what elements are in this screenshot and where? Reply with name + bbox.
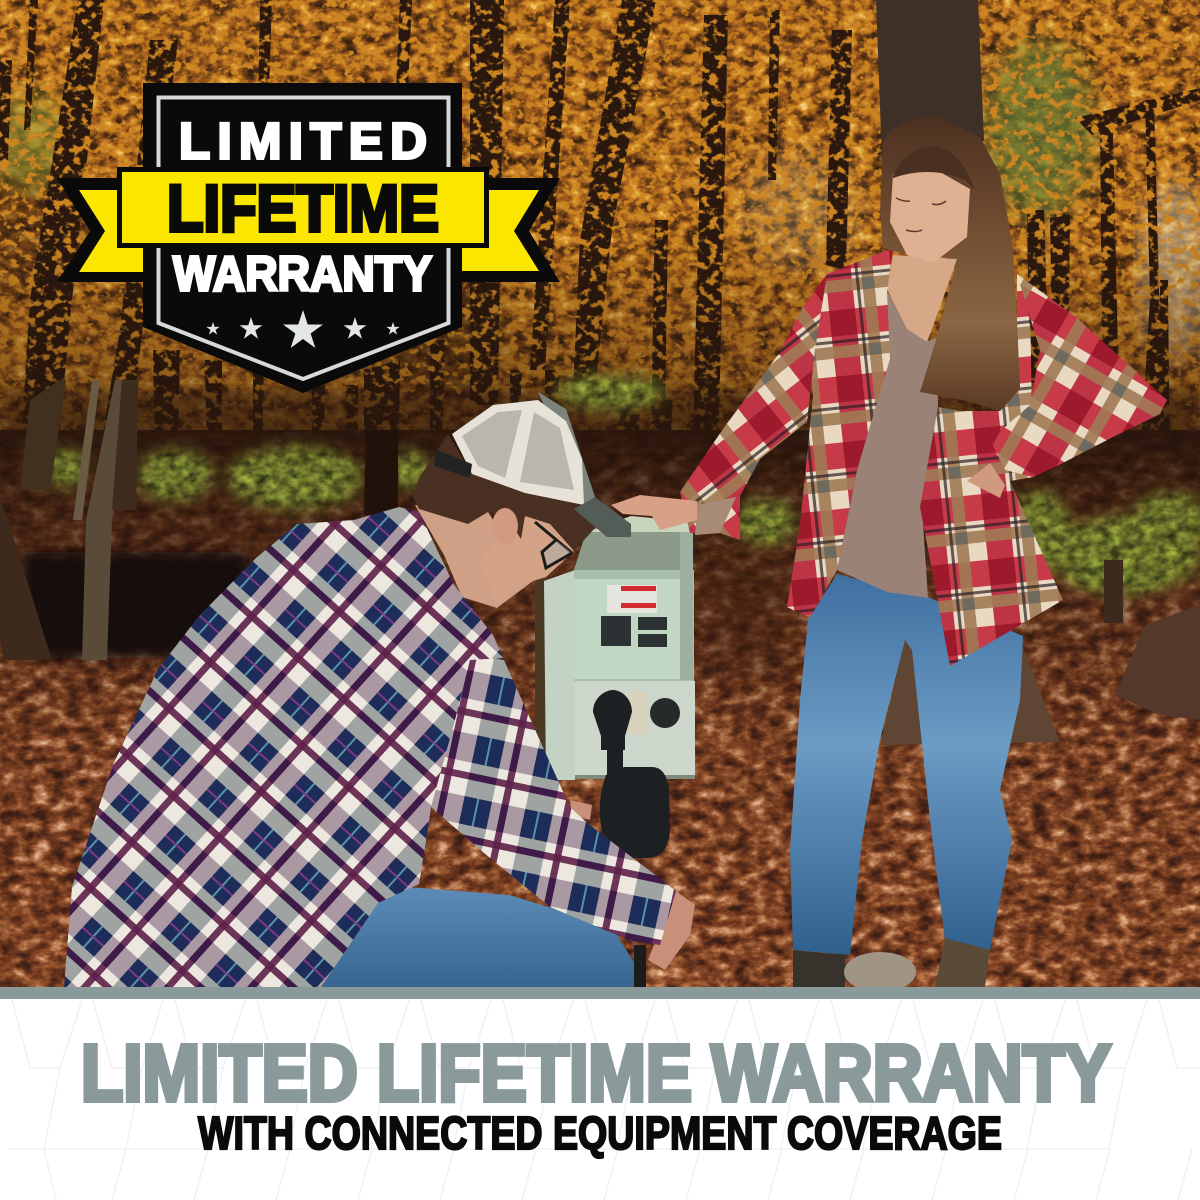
glasses [535, 522, 572, 568]
woman [611, 115, 1167, 992]
round outlet [650, 698, 680, 728]
WARRANTY: WARRANTY [173, 246, 432, 302]
circuit breakers [601, 616, 667, 647]
footer grey band [0, 987, 1200, 999]
hand on hip [967, 463, 1005, 498]
facial features [896, 198, 946, 232]
shirt right panel and sleeve [920, 274, 1167, 666]
shirt body [64, 507, 520, 987]
shirt sleeve [431, 658, 676, 945]
foreground left trunks [0, 380, 398, 660]
face [890, 168, 970, 263]
jeans [317, 887, 635, 987]
warning sticker [607, 585, 657, 613]
yellow banner [117, 167, 489, 248]
shirt left panel and sleeve [680, 248, 893, 618]
trunk base behind the woman [880, 640, 1060, 745]
tree trunks [0, 0, 1200, 600]
lower hand [648, 888, 695, 970]
neck and chest [887, 255, 957, 342]
hand at plug [570, 800, 592, 820]
connected plug and cord [593, 690, 670, 858]
jeans [790, 574, 1023, 955]
trucker cap [434, 392, 631, 537]
black shield [143, 83, 462, 393]
man [64, 392, 695, 987]
hair [880, 115, 1020, 411]
receptacle [627, 692, 647, 734]
ribbon tails [57, 178, 560, 282]
neck [415, 505, 533, 608]
forest floor and leaves [0, 374, 1200, 990]
taupe top [837, 292, 938, 598]
LIMITED: LIMITED [179, 112, 427, 170]
white footer panel [0, 987, 1200, 1200]
warranty badge [57, 83, 560, 393]
five stars [206, 310, 400, 348]
hand on lid [611, 495, 697, 530]
leaf flecks over the canopy [0, 0, 1200, 540]
cuff [695, 497, 736, 535]
face [480, 516, 582, 608]
ear [492, 508, 518, 544]
outlet box [535, 516, 695, 858]
silver inner outline [158, 98, 448, 379]
forest background foliage [0, 0, 1200, 540]
hair [413, 434, 595, 551]
hair over forehead [893, 146, 975, 190]
footer subtitle: WITH CONNECTED EQUIPMENT COVERAGE [198, 1107, 1002, 1159]
LIFETIME: LIFETIME [167, 172, 439, 245]
stump and post on the right [1104, 560, 1200, 720]
boots [793, 938, 990, 987]
large tree behind the woman [876, 0, 984, 250]
manhole cover [844, 952, 916, 992]
